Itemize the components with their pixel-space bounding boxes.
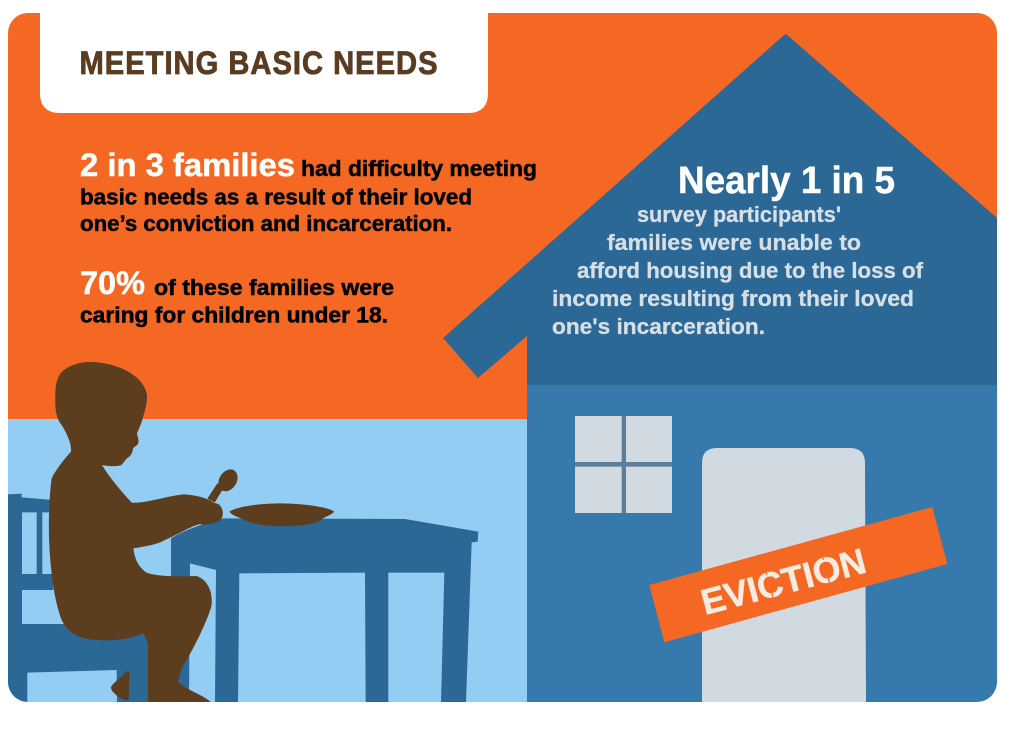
illustration: chair	[8, 494, 148, 702]
text block: nearly 1 in 5: afford housing due to the loss of	[577, 258, 924, 283]
text block: 70% of families	[80, 265, 394, 328]
house body	[527, 385, 997, 702]
child body	[49, 362, 223, 702]
illustration: table	[171, 518, 478, 702]
illustration: house with roof	[443, 34, 997, 702]
text block: 2 in 3 families: 2 in 3 families	[80, 147, 295, 183]
text block: nearly 1 in 5	[552, 160, 924, 339]
text block: nearly 1 in 5: income resulting from their loved	[552, 286, 914, 311]
text block: nearly 1 in 5: Nearly 1 in 5	[678, 160, 895, 202]
eviction banner	[649, 507, 947, 642]
text block: 2 in 3 families: had difficulty meeting	[301, 156, 537, 181]
house window	[575, 416, 672, 513]
title: MEETING BASIC NEEDS	[80, 46, 439, 81]
text block: nearly 1 in 5: one's incarceration.	[552, 314, 765, 339]
text block: 70% of families: 70%	[80, 265, 145, 301]
plate	[229, 503, 334, 526]
illustration: child silhouette with spoon and plate	[49, 362, 334, 702]
text block: 70% of families: of these families were	[154, 275, 394, 300]
text block: 2 in 3 families	[80, 147, 537, 236]
text block: 2 in 3 families: one’s conviction and incarceration.	[80, 211, 452, 236]
text block: 2 in 3 families: basic needs as a result of their loved	[80, 184, 472, 210]
house roof	[443, 34, 997, 385]
eviction banner: EVICTION	[697, 540, 870, 623]
spoon	[207, 469, 238, 503]
child foot	[111, 671, 129, 701]
house door	[702, 448, 866, 702]
text block: 70% of families: caring for children under 18.	[80, 302, 388, 328]
text block: nearly 1 in 5: families were unable to	[607, 230, 861, 255]
heading tab	[40, 13, 488, 113]
text block: nearly 1 in 5: survey participants'	[637, 202, 841, 227]
